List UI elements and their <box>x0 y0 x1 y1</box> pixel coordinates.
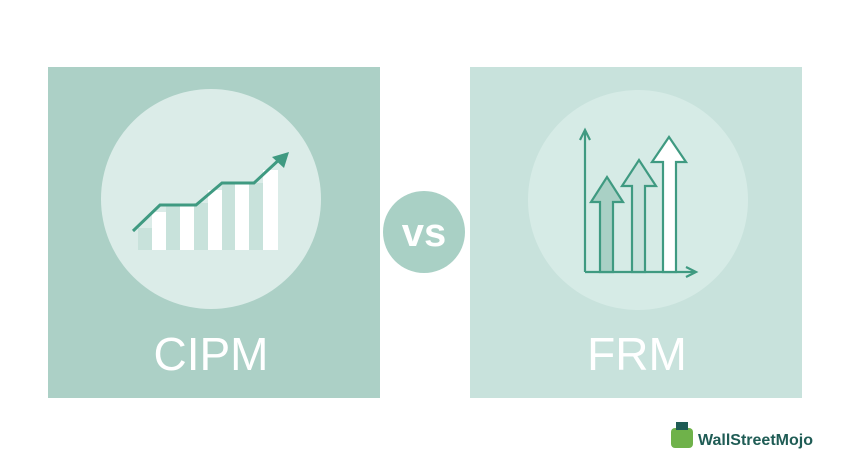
badge: vs <box>383 191 465 273</box>
label: CIPM: CIPM <box>154 328 268 380</box>
panel: CIPM <box>48 67 380 398</box>
logo: WallStreetMojo <box>671 422 813 449</box>
panel: FRM <box>470 67 802 398</box>
badge: vs: vs <box>402 211 446 255</box>
icon: circle with rising chart <box>101 89 321 309</box>
label: FRM: FRM <box>587 328 687 380</box>
logo: WallStreetMojo: WallStreetMojo <box>698 432 813 449</box>
icon: circle with arrows chart <box>528 90 748 310</box>
